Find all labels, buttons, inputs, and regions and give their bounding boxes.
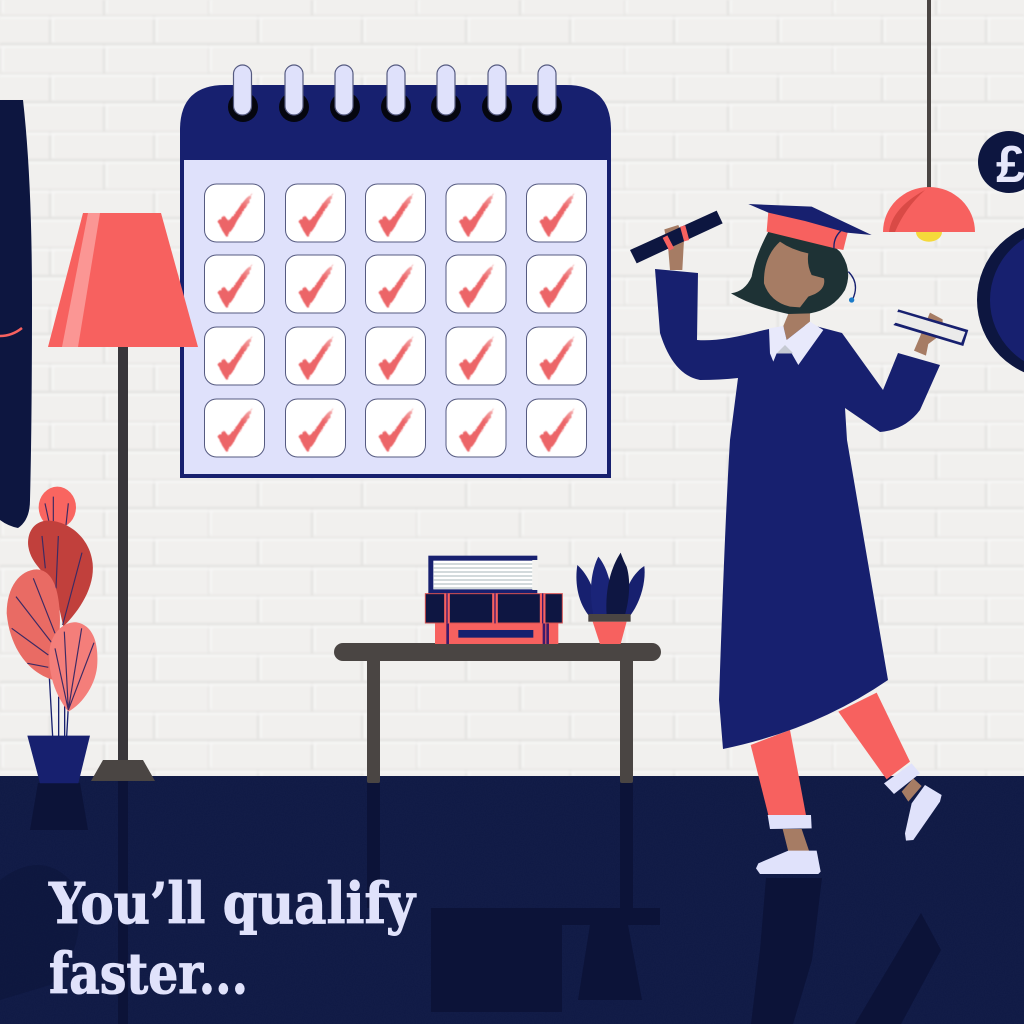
collar knot xyxy=(777,345,793,353)
stack of books xyxy=(425,556,562,644)
left hanging gown xyxy=(0,100,32,528)
cap band xyxy=(767,212,848,250)
diploma ribbons xyxy=(665,226,687,249)
plant in navy pot xyxy=(7,487,97,783)
title xyxy=(48,871,416,1007)
title line one: You’ll qualify xyxy=(48,871,416,937)
mortarboard xyxy=(748,204,872,235)
tassel bead xyxy=(849,297,854,303)
table xyxy=(334,643,661,783)
binder rings xyxy=(234,65,556,115)
large coin xyxy=(977,221,1024,379)
calendar body xyxy=(182,158,609,476)
ceiling lamp xyxy=(883,0,975,242)
book hand xyxy=(914,313,943,356)
floor reflections xyxy=(0,781,941,1024)
floor xyxy=(0,776,1024,1024)
ticked day cells xyxy=(204,184,586,457)
tassel xyxy=(834,229,855,299)
wall calendar xyxy=(180,65,611,476)
diploma scroll xyxy=(630,211,723,263)
open book xyxy=(893,309,968,346)
brick wall background xyxy=(0,0,1024,776)
small potted plant xyxy=(576,553,645,644)
neck xyxy=(783,310,810,340)
calendar header xyxy=(180,85,611,158)
ring holes xyxy=(228,92,562,122)
upper body detail xyxy=(630,204,968,365)
floor lamp xyxy=(48,213,198,781)
graduate xyxy=(630,204,968,874)
title line two: faster... xyxy=(49,941,248,1007)
legs and shoes xyxy=(751,693,942,874)
gown xyxy=(655,269,940,749)
book pages xyxy=(895,312,965,343)
pound coin xyxy=(978,131,1024,194)
face xyxy=(764,242,824,307)
hair xyxy=(731,232,848,314)
diploma hand xyxy=(664,225,684,270)
collar xyxy=(769,322,823,365)
